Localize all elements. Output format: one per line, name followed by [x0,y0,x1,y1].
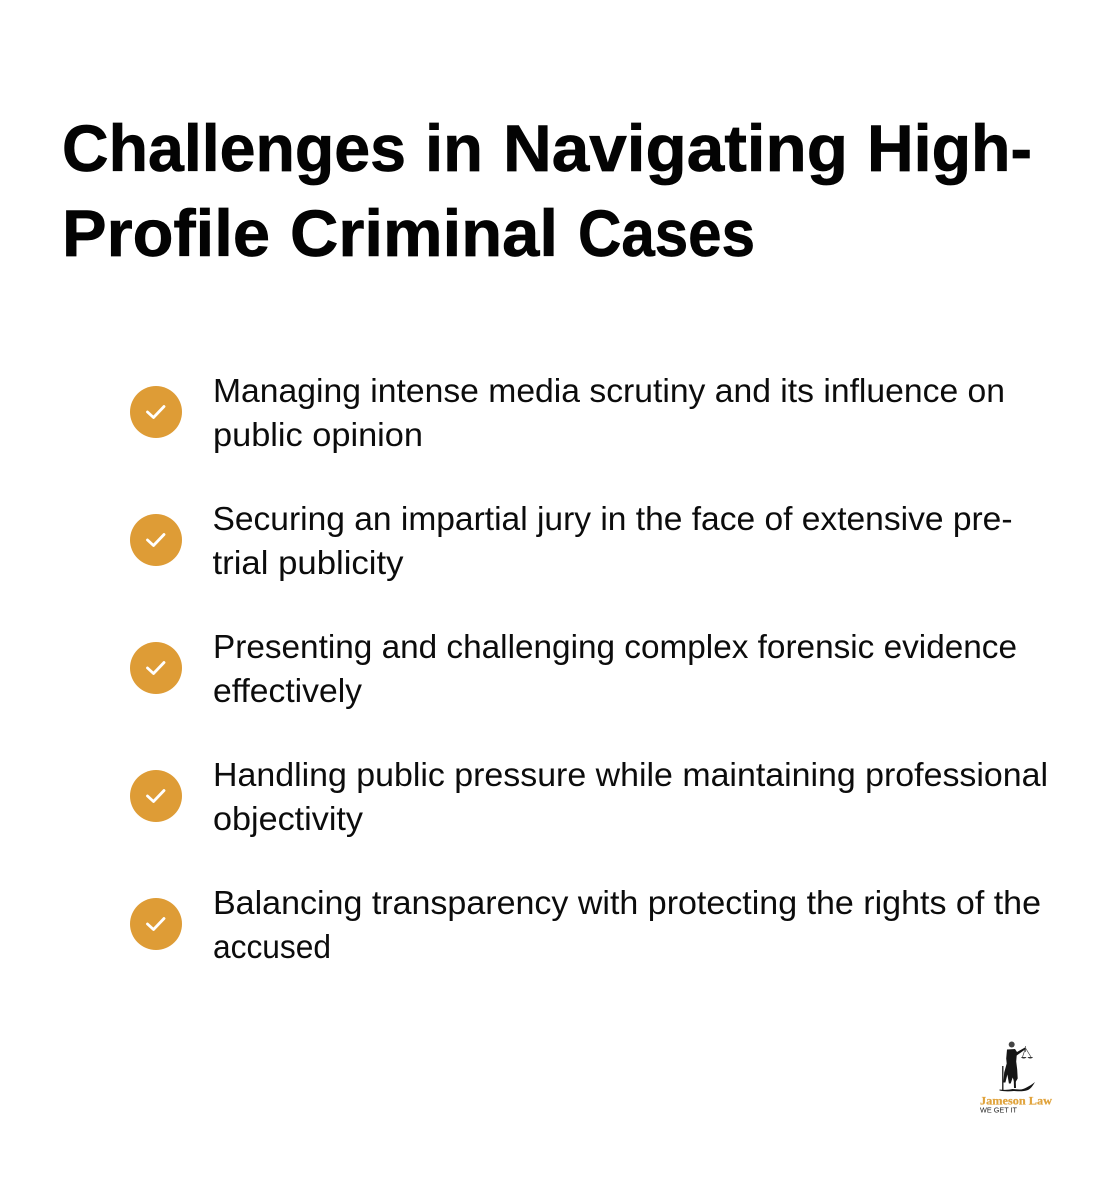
logo: Jameson Law [980,1042,1053,1114]
item 3: forensic evidence: Presenting and challenging complex forensic evidence [213,628,1017,665]
title [62,111,1032,270]
title: High- [867,111,1032,185]
title: Navigating [503,111,848,185]
item 4: public pressure: Handling public pressure while maintaining professional [213,756,1048,793]
item 5: transparency [130,884,1041,965]
item 5: transparency: Balancing transparency with protecting the rights of the [213,884,1041,921]
title: Challenges [62,111,406,185]
item 3: forensic evidence: effectively [213,672,363,709]
title: Criminal [290,196,558,270]
item 2: impartial jury: Securing an impartial jury in the face of extensive pre- [212,500,1012,537]
item 4: public pressure [130,756,1048,837]
item 2: impartial jury: trial publicity [212,544,404,581]
item 3: forensic evidence [130,628,1017,709]
title: Cases [578,196,755,270]
logo wordmark: Jameson Law [980,1096,1053,1108]
logo tagline: WE GET IT [980,1108,1018,1114]
title: Profile [62,196,270,270]
item 2: impartial jury [130,500,1012,581]
checklist [130,372,1048,965]
item 1: media scrutiny: public opinion [213,416,423,453]
item 4: public pressure: objectivity [213,800,364,837]
title: in [425,111,483,185]
item 5: transparency: accused [213,928,331,965]
icon: lady justice with letter L [1000,1042,1035,1091]
item 1: media scrutiny: Managing intense media scrutiny and its influence on [213,372,1005,409]
item 1: media scrutiny [130,372,1005,453]
